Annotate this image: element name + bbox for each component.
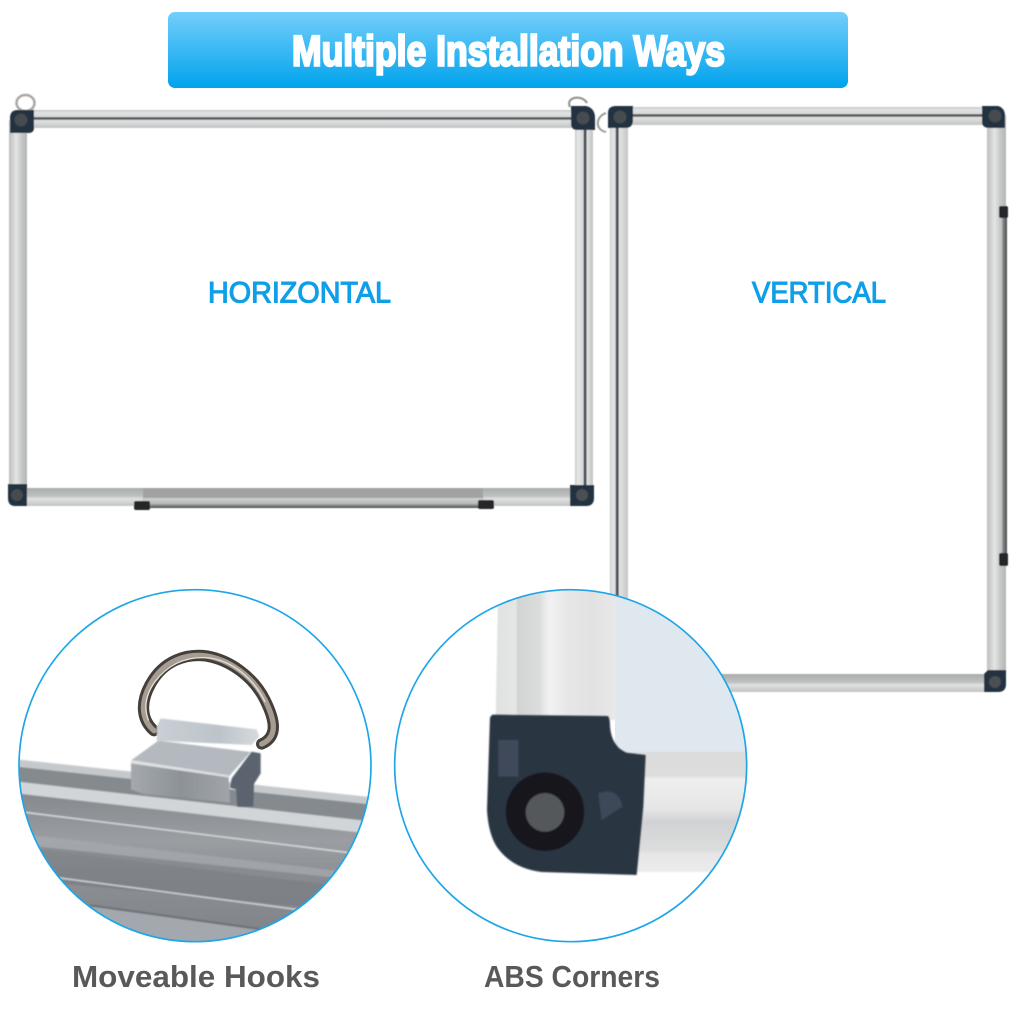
horizontal whiteboard xyxy=(8,95,595,510)
top frame bar xyxy=(620,107,990,125)
left frame bar xyxy=(610,115,628,605)
right frame bar xyxy=(987,115,1006,685)
title text: Multiple Installation Ways xyxy=(292,28,725,76)
abs corner block xyxy=(487,715,646,875)
board surface xyxy=(615,596,746,754)
caption: abs corners: ABS Corners xyxy=(484,959,660,994)
vertical whiteboard xyxy=(598,106,1008,692)
detail circle: abs corner xyxy=(385,580,755,950)
corner top right xyxy=(571,106,595,130)
slider clip xyxy=(131,718,261,807)
corner bottom right xyxy=(570,485,594,506)
left frame bar xyxy=(9,120,27,495)
ring: horizontal board left hook xyxy=(16,95,34,111)
ring: horizontal board right hook xyxy=(569,98,587,107)
bottom frame bar xyxy=(20,488,580,506)
corner top right xyxy=(982,106,1005,128)
right frame bar xyxy=(575,120,593,495)
pen tray xyxy=(999,206,1008,566)
caption: moveable hooks: Moveable Hooks xyxy=(72,959,320,994)
vertical frame xyxy=(496,580,617,720)
title banner xyxy=(168,12,848,88)
corner top left xyxy=(10,110,34,133)
ring: vertical board hook xyxy=(598,113,606,132)
bottom frame bar xyxy=(700,674,990,692)
label: horizontal: HORIZONTAL xyxy=(208,276,391,310)
corner bottom right xyxy=(984,670,1006,692)
d-ring xyxy=(143,655,273,744)
label: vertical: VERTICAL xyxy=(752,276,886,310)
circle outline xyxy=(19,590,371,942)
rail xyxy=(17,759,373,950)
pen tray xyxy=(134,488,494,510)
horizontal frame xyxy=(633,752,755,872)
corner bottom left xyxy=(8,484,27,506)
top frame bar xyxy=(20,110,585,128)
corner top left xyxy=(608,106,633,128)
detail circle: moveable hook xyxy=(18,588,372,942)
circle outline xyxy=(395,590,747,942)
